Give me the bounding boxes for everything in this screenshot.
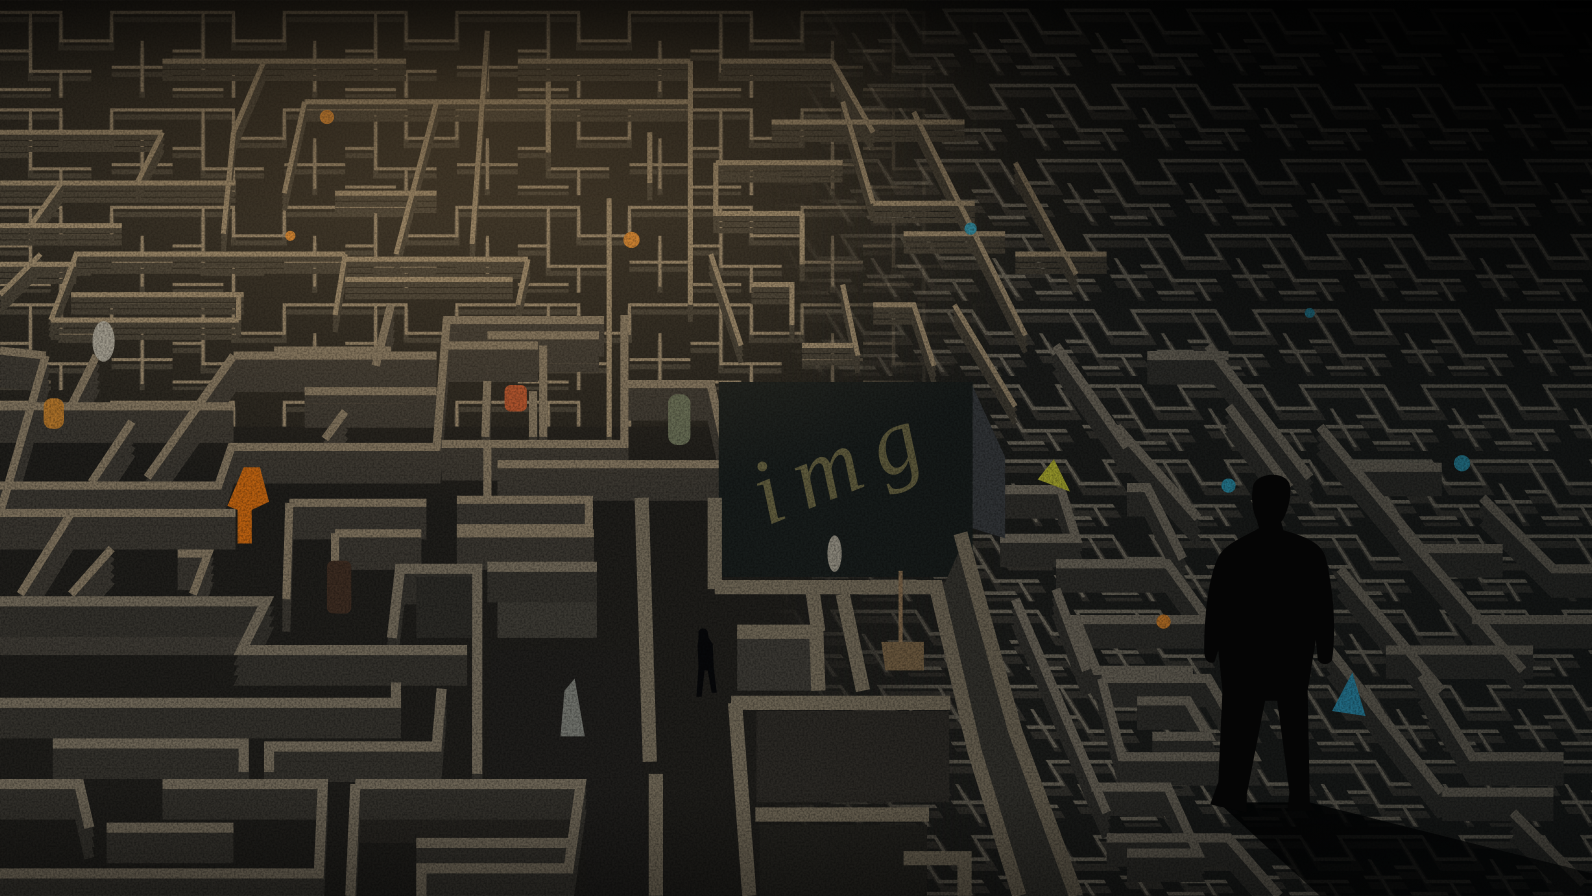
right side walls bbox=[1000, 345, 1592, 896]
scrawled writing: img bbox=[736, 385, 935, 545]
foreground walls centre bbox=[416, 498, 1076, 896]
far maze texture: left bbox=[0, 0, 958, 427]
prop: yellow-orange capsule bbox=[44, 398, 64, 429]
distant walls bbox=[0, 31, 1107, 454]
tiny silhouette figure bbox=[696, 628, 717, 697]
prop: pale figure bbox=[560, 678, 585, 736]
prop: pale statues bbox=[668, 394, 690, 445]
figure: orange lamp bbox=[227, 467, 269, 543]
prop: yellow shape bbox=[1038, 459, 1070, 492]
man's long shadow bbox=[1218, 802, 1592, 896]
far maze texture: right bbox=[772, 0, 1592, 896]
prop: stand bbox=[881, 642, 924, 670]
prop: white bird bbox=[92, 321, 115, 362]
prop: teal cone bbox=[1332, 672, 1366, 716]
foreground walls left bbox=[0, 567, 597, 896]
foreground wall faces bbox=[0, 567, 597, 843]
small props bbox=[44, 110, 1470, 736]
dark floor corridor bbox=[487, 650, 650, 896]
dark panel with scrawl bbox=[719, 382, 1005, 577]
prop: colored bits bbox=[965, 223, 1470, 493]
middle walls bbox=[0, 305, 729, 632]
prop: orange capsule bbox=[505, 385, 527, 411]
prop: bird on wall bbox=[827, 535, 842, 572]
prop: brown cylinder bbox=[327, 561, 351, 613]
man silhouette bbox=[1204, 475, 1334, 812]
